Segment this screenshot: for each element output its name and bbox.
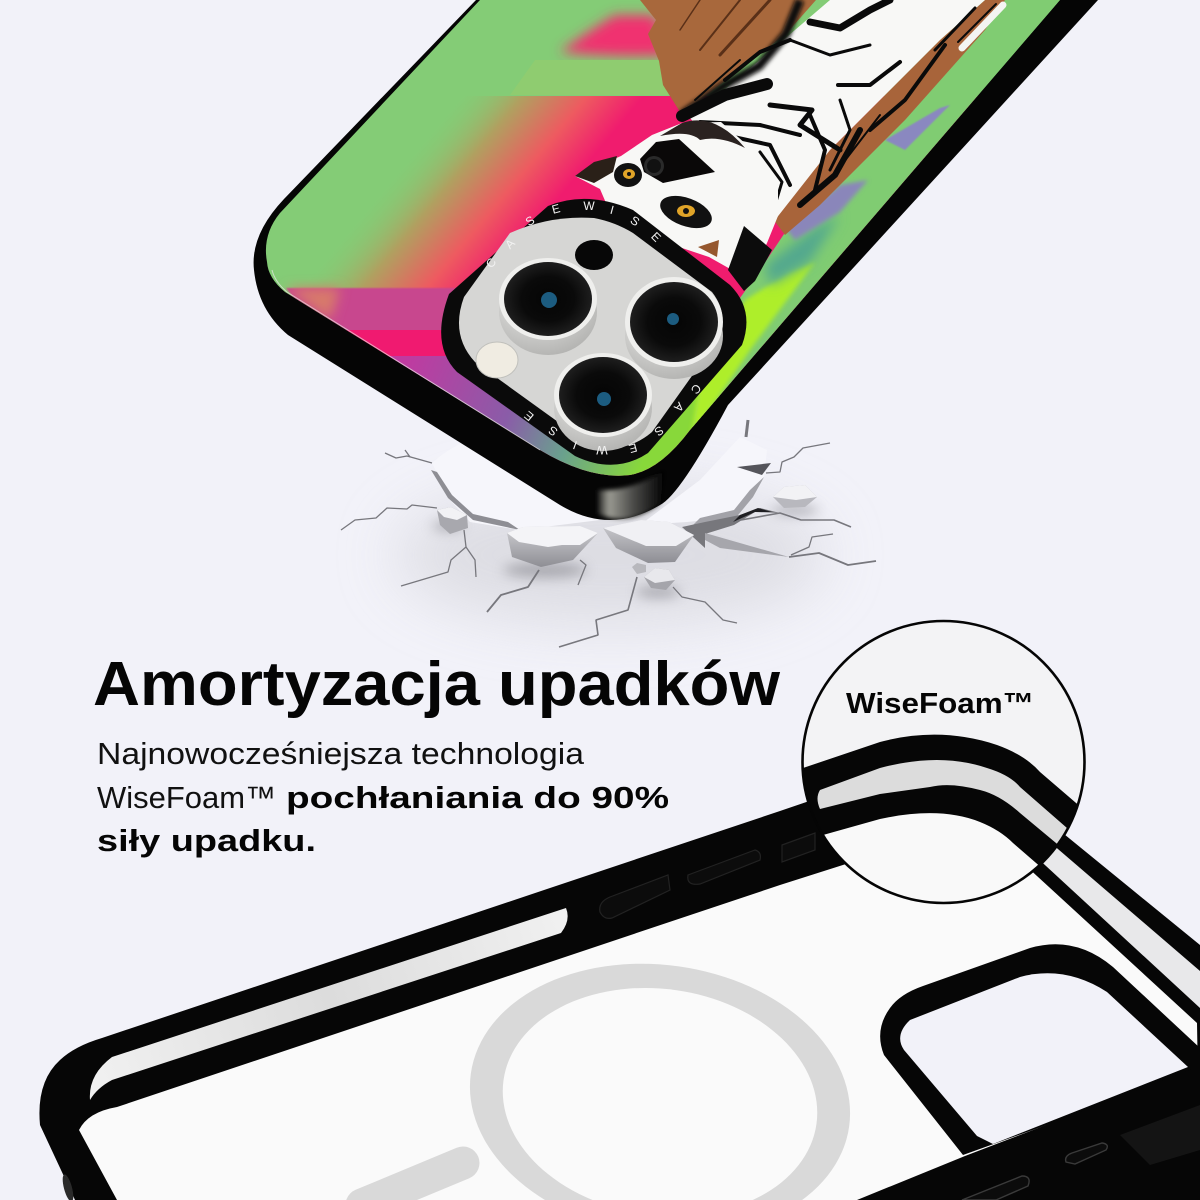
island brand text: I [571, 438, 579, 452]
case corner gloss [598, 470, 665, 519]
callout label: WiseFoam™ [846, 688, 1034, 720]
tiger fur shadow edge [682, 0, 800, 115]
camera island [441, 199, 746, 465]
lens bases [499, 269, 723, 451]
island brand text: S [523, 213, 537, 229]
ear [575, 156, 617, 183]
cracks [341, 420, 876, 647]
cracked wall impact [341, 420, 876, 647]
art lower pink [346, 330, 442, 358]
wedge [737, 463, 771, 475]
headline: Amortyzacja upadków [93, 650, 781, 719]
art right teal [765, 215, 840, 285]
left plate rim [431, 470, 520, 530]
art lower purple [388, 356, 720, 476]
gap shading [682, 508, 780, 548]
dark gap [733, 508, 772, 522]
lens top left [499, 258, 597, 340]
island brand text: A [671, 399, 687, 415]
art right side base [690, 0, 1060, 440]
eye left [614, 163, 642, 187]
island brand text: W [596, 443, 608, 457]
chunk shadows [432, 505, 819, 598]
magnet ring [452, 940, 868, 1200]
art right lime [690, 262, 815, 440]
description text [97, 736, 669, 858]
art band [510, 60, 668, 95]
island brand text: W [583, 199, 595, 213]
island brand text: I [609, 203, 615, 217]
tiger left fur [640, 0, 816, 115]
bottom edge grip [1120, 1105, 1200, 1165]
right broken plate [640, 437, 767, 525]
foam strip left [90, 908, 568, 1100]
tiger stripes [680, 0, 1003, 205]
left bottom hole [61, 1173, 75, 1200]
lens bottom [554, 353, 652, 437]
bottom buttons [962, 1143, 1107, 1200]
tiger white belly [690, 0, 985, 220]
eye right [660, 196, 712, 228]
case frame [39, 761, 1200, 1200]
description text: WiseFoam™ [97, 780, 276, 815]
art right purple [785, 180, 868, 240]
right plate rim [688, 477, 764, 530]
case interior [79, 834, 1200, 1200]
description text: siły upadku. [97, 823, 316, 858]
head dark crown [660, 120, 745, 148]
art edge highlight [272, 270, 540, 450]
case artwork [266, 0, 1060, 476]
bottom edge band [857, 1066, 1200, 1200]
island brand text: A [502, 236, 518, 252]
phone with printed case [250, 0, 1100, 520]
tiger right fur [770, 0, 1005, 235]
camera plate [459, 218, 723, 448]
island brand text: E [521, 408, 537, 424]
island brand text: E [627, 440, 639, 456]
island brand text: C [688, 381, 704, 397]
island brand text: E [550, 201, 562, 217]
island brand text: S [652, 423, 666, 439]
tiger head [575, 122, 778, 268]
flash [476, 342, 518, 378]
rubble chunks [437, 485, 817, 590]
side buttons [600, 833, 815, 918]
island brand text: C [483, 255, 499, 271]
description text: pochłaniania do 90% [286, 780, 669, 815]
left broken plate [432, 438, 600, 530]
art top pink patch [560, 15, 668, 56]
island brand text: E [648, 229, 664, 245]
camera cut-out frame [880, 944, 1200, 1155]
island brand text: S [628, 213, 642, 229]
magnified frame [804, 734, 1077, 865]
transparent case back view [39, 761, 1200, 1200]
magnifier callout WiseFoam [801, 620, 1086, 904]
island brand text [483, 199, 704, 457]
microphone hole [575, 240, 613, 270]
camera cut-out [900, 973, 1188, 1144]
description text: Najnowocześniejsza technologia [97, 736, 585, 771]
lens right [625, 277, 723, 367]
art lower left magenta [286, 288, 470, 332]
muzzle [640, 139, 715, 183]
head black patch [728, 226, 772, 291]
island brand text: S [546, 423, 560, 439]
case body [254, 0, 1098, 520]
lower right slab [705, 533, 789, 557]
magnet alignment pill [362, 1163, 463, 1200]
foam strip right [1020, 825, 1200, 1008]
